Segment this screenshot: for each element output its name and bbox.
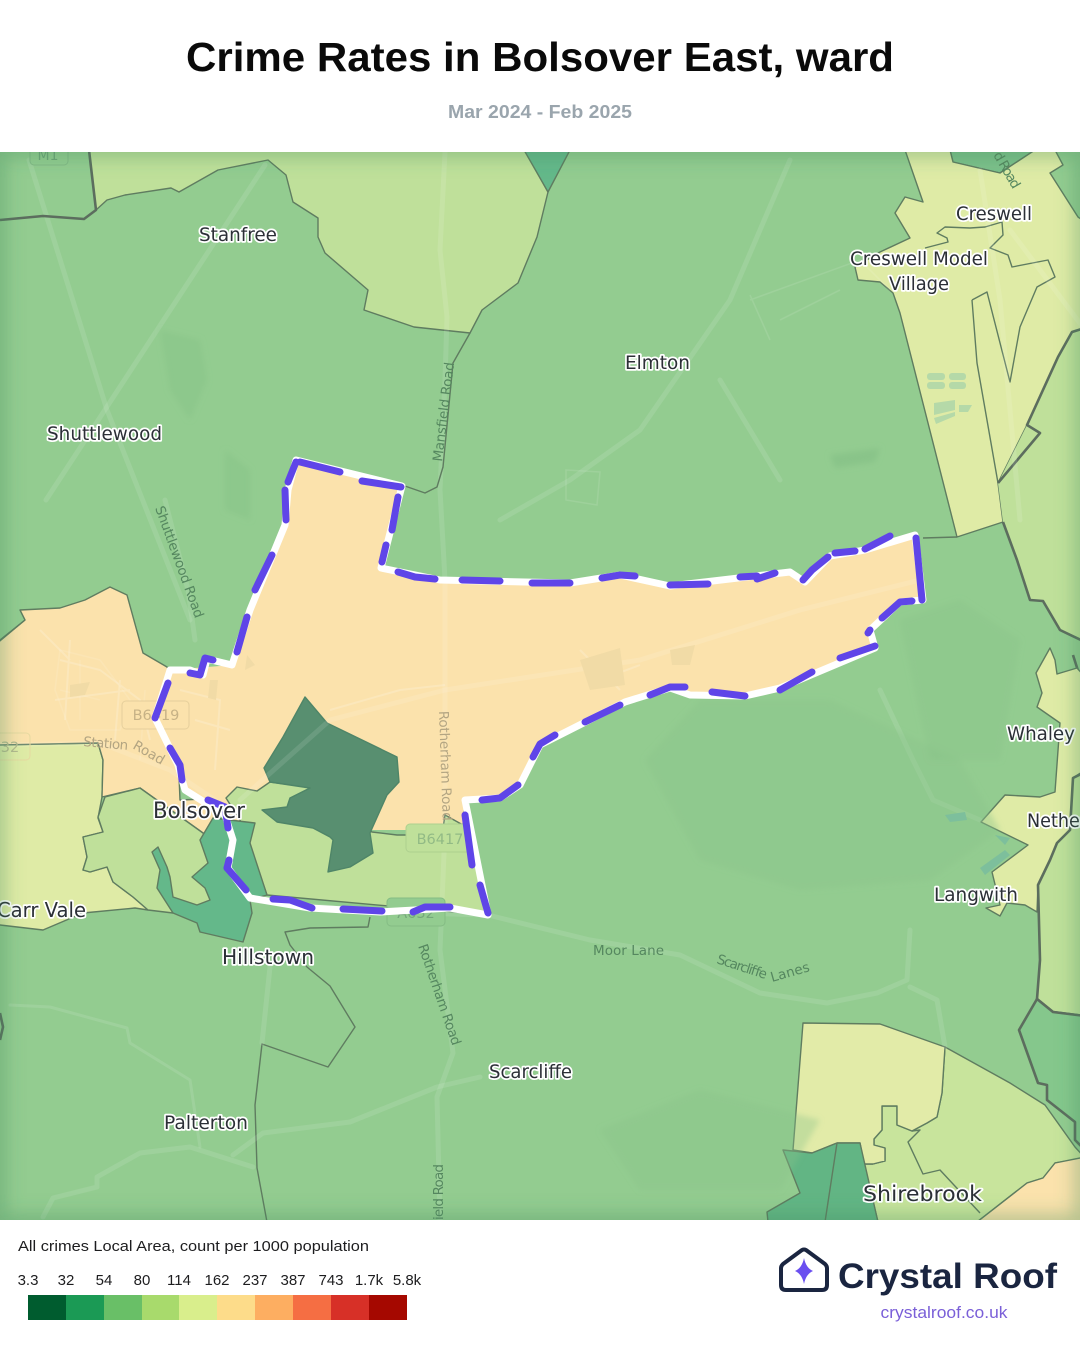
road shield: B6419 — [122, 701, 189, 729]
boundary: east strip — [998, 328, 1080, 677]
legend: scale values: 3.3 — [18, 1272, 38, 1289]
place labels: Village — [889, 273, 949, 295]
area: light green east lower strip — [1037, 772, 1080, 1016]
area: mid green top right — [951, 152, 1030, 172]
area: Creswell — [855, 150, 1080, 537]
area: ward peach fill — [155, 460, 923, 830]
road network — [0, 152, 1080, 1220]
legend: scale values: 5.8k — [393, 1272, 422, 1289]
legend title: All crimes Local Area, count per 1000 population — [18, 1238, 369, 1255]
road shield: B6417: B6417 — [417, 832, 463, 848]
area: mid green Bolsover south — [152, 818, 267, 942]
road shield: A632 west: 32 — [1, 740, 19, 756]
ward boundary: white outline — [155, 460, 923, 915]
place labels: Shirebrook — [863, 1182, 983, 1206]
road labels: Shuttlewood Road — [151, 504, 207, 620]
area: Creswell internal boundary — [925, 222, 1055, 483]
area: light green west of Bolsover — [83, 788, 225, 913]
area: light green Shirebrook — [864, 1047, 1080, 1222]
road labels: Road — [130, 738, 167, 768]
area: mid green south east — [1019, 999, 1080, 1150]
area: light green south of ward — [226, 782, 488, 915]
legend: scale values: 1.7k — [355, 1272, 384, 1289]
road labels: Rotherham Road — [435, 711, 455, 821]
water patches near Creswell — [927, 373, 972, 424]
place labels: Creswell — [956, 203, 1032, 225]
area: mid green south — [767, 1143, 878, 1222]
area: mid green south divider — [825, 1143, 837, 1222]
road labels: Scarcliffe — [715, 952, 769, 983]
road labels: ield Road — [431, 1164, 447, 1220]
place labels: Whaley — [1007, 723, 1075, 745]
water patches near Langwith — [945, 812, 1010, 875]
place labels: Palterton — [164, 1112, 248, 1134]
darker woodland patches — [782, 452, 1000, 1172]
road labels: Mansfield Road — [430, 361, 458, 462]
legend: scale values: 162 — [204, 1272, 230, 1289]
road labels: d Road — [990, 149, 1023, 192]
legend: scale values: 387 — [280, 1272, 306, 1289]
road shield: B6419: B6419 — [133, 708, 179, 724]
place labels: Langwith — [934, 884, 1018, 906]
legend: scale values: 743 — [318, 1272, 344, 1289]
map edge vignette — [0, 146, 1080, 1226]
legend: scale values: 54 — [96, 1272, 112, 1289]
title: Crime Rates in Bolsover East, ward — [186, 34, 894, 80]
legend: scale values: 114 — [167, 1272, 191, 1289]
place labels: Creswell Model — [850, 248, 988, 270]
road shield: A632 south: A632 — [397, 906, 435, 922]
legend: scale values — [18, 1272, 422, 1289]
area: peach south east corner — [977, 1157, 1080, 1222]
road shield: B6417 — [406, 824, 472, 852]
area: mid green north — [524, 150, 570, 192]
area: south boundaries — [255, 917, 370, 1222]
logo: Crystal Roof — [781, 1250, 1057, 1322]
subtitle: date range: Mar 2024 - Feb 2025 — [448, 102, 632, 122]
map base area — [0, 152, 1080, 1220]
ward boundary: purple dashes — [155, 462, 922, 913]
area: light green east strip — [998, 328, 1080, 640]
area: yellow Shirebrook — [793, 1023, 945, 1164]
road shield: M1 — [30, 152, 68, 166]
road shield: A632 south — [387, 898, 445, 926]
area: Whaley and Nether Langwith — [981, 648, 1080, 916]
road labels — [83, 149, 1023, 1220]
area: Carr Vale yellow-green — [0, 743, 148, 930]
place labels: Shuttlewood — [47, 423, 162, 445]
place labels: Hillstown — [222, 945, 314, 969]
area: Shirebrook internal boundary — [908, 1130, 980, 1213]
logo wordmark: Crystal Roof — [838, 1257, 1057, 1296]
place labels: Elmton — [625, 352, 690, 374]
legend: scale values: 80 — [134, 1272, 150, 1289]
other boundaries — [0, 150, 96, 220]
road labels: Rotherham Road — [414, 942, 464, 1048]
place labels — [0, 203, 1080, 1206]
town street texture in peach area — [40, 630, 640, 770]
place labels: Stanfree — [199, 224, 277, 246]
road labels: Station — [83, 734, 129, 754]
icon: house with star — [781, 1250, 827, 1290]
legend: colour bar — [28, 1295, 407, 1320]
road labels: Lanes — [769, 959, 812, 986]
road shield: A632 west — [0, 733, 30, 760]
road labels: Moor Lane — [593, 943, 664, 959]
road shield: M1: M1 — [38, 148, 58, 164]
area: dark green woodland — [262, 697, 399, 872]
logo url: crystalroof.co.uk — [880, 1304, 1008, 1322]
area: light green north — [89, 150, 548, 333]
legend: scale values: 237 — [242, 1272, 268, 1289]
place labels: Bolsover — [153, 799, 246, 824]
area: peach Bolsover west — [0, 587, 227, 835]
place labels: Scarcliffe — [489, 1061, 572, 1083]
legend: scale values: 32 — [58, 1272, 74, 1289]
